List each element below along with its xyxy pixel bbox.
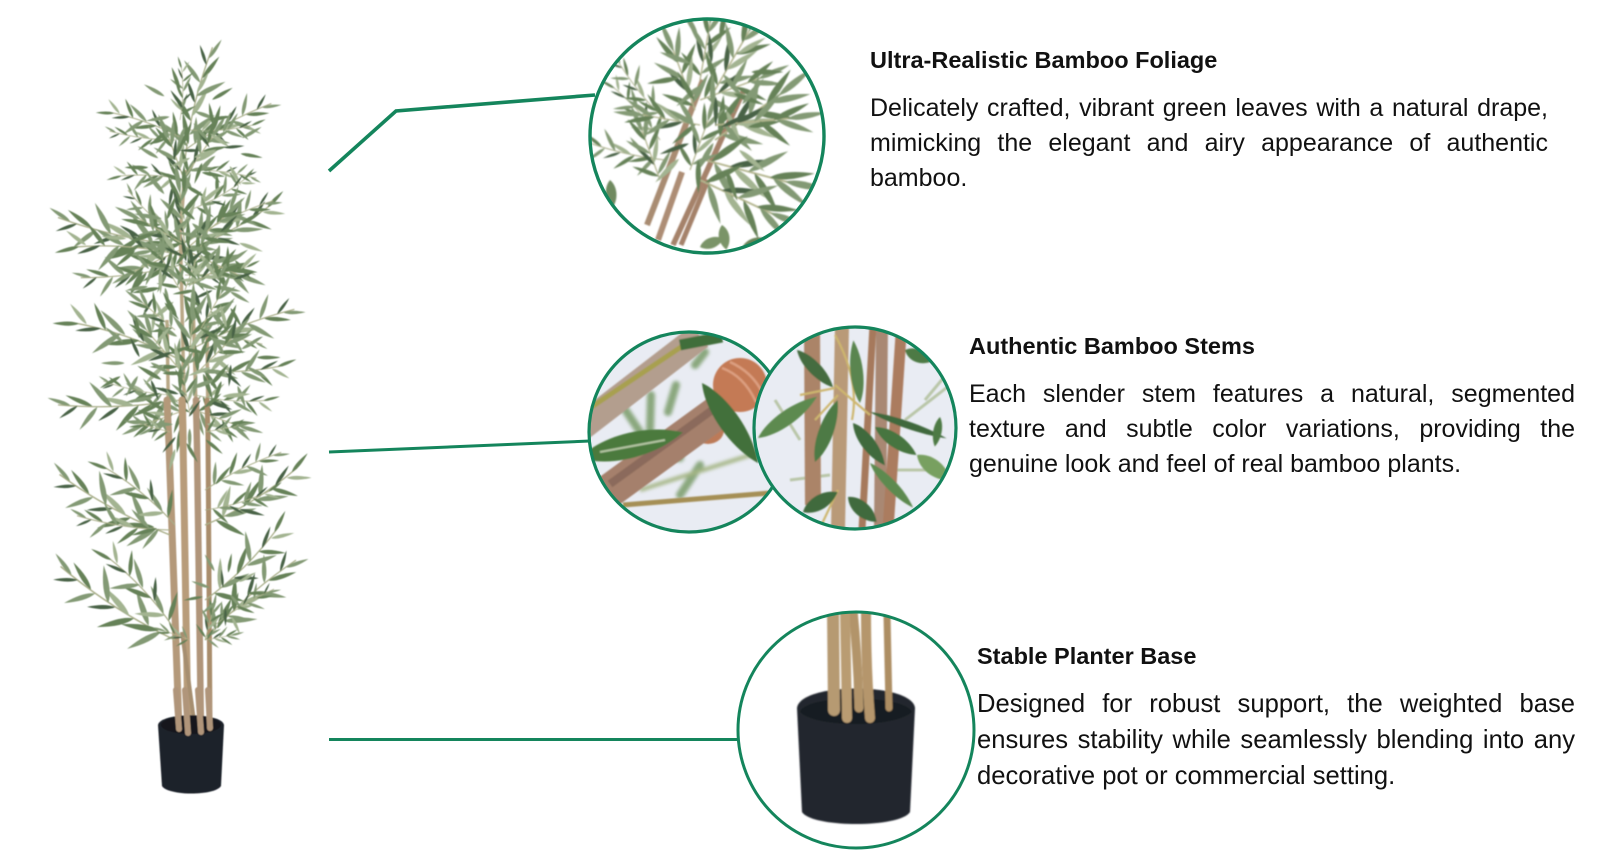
detail circle: foliage bbox=[588, 17, 826, 255]
body: foliage: bamboo. bbox=[870, 164, 967, 192]
body: planter: ensures stability while seamlessly blending into any bbox=[977, 726, 1575, 754]
feature text: foliage bbox=[870, 47, 1548, 192]
main stems bbox=[167, 400, 179, 728]
body: foliage bbox=[870, 94, 1548, 192]
body: foliage: Delicately crafted, vibrant green leaves with a natural drape, bbox=[870, 94, 1548, 122]
detail circle: cut stem bbox=[570, 332, 789, 532]
feature text: stems bbox=[969, 333, 1575, 478]
body: stems: genuine look and feel of real bamboo plants. bbox=[969, 450, 1461, 478]
sprays top bbox=[157, 31, 236, 165]
heading: planter: Stable Planter Base bbox=[977, 643, 1196, 669]
detail circle: planter bbox=[738, 610, 974, 848]
connector line: planter bbox=[329, 738, 738, 741]
body: stems: Each slender stem features a natural, segmented bbox=[969, 380, 1575, 408]
feature text: planter bbox=[977, 643, 1575, 790]
connector line: foliage bbox=[329, 95, 595, 171]
leaves over stems bbox=[139, 368, 242, 475]
sprays lower middle bbox=[46, 282, 192, 385]
bamboo plant photo bbox=[31, 31, 329, 794]
heading: foliage: Ultra-Realistic Bamboo Foliage bbox=[870, 47, 1217, 73]
body: planter: decorative pot or commercial setting. bbox=[977, 762, 1395, 790]
body: stems: texture and subtle color variations, providing the bbox=[969, 415, 1575, 443]
pot bbox=[158, 715, 224, 794]
connector line: stems bbox=[329, 441, 590, 452]
detail circle: stems bbox=[754, 325, 956, 530]
body: foliage: mimicking the elegant and airy appearance of authentic bbox=[870, 129, 1548, 157]
illustration layer bbox=[48, 17, 976, 850]
body: stems bbox=[969, 380, 1575, 478]
body: planter: Designed for robust support, the weighted base bbox=[977, 690, 1575, 718]
heading: stems: Authentic Bamboo Stems bbox=[969, 333, 1255, 359]
sprays lower bbox=[34, 449, 182, 563]
sprays upper middle bbox=[41, 193, 185, 276]
body: planter bbox=[977, 690, 1575, 790]
